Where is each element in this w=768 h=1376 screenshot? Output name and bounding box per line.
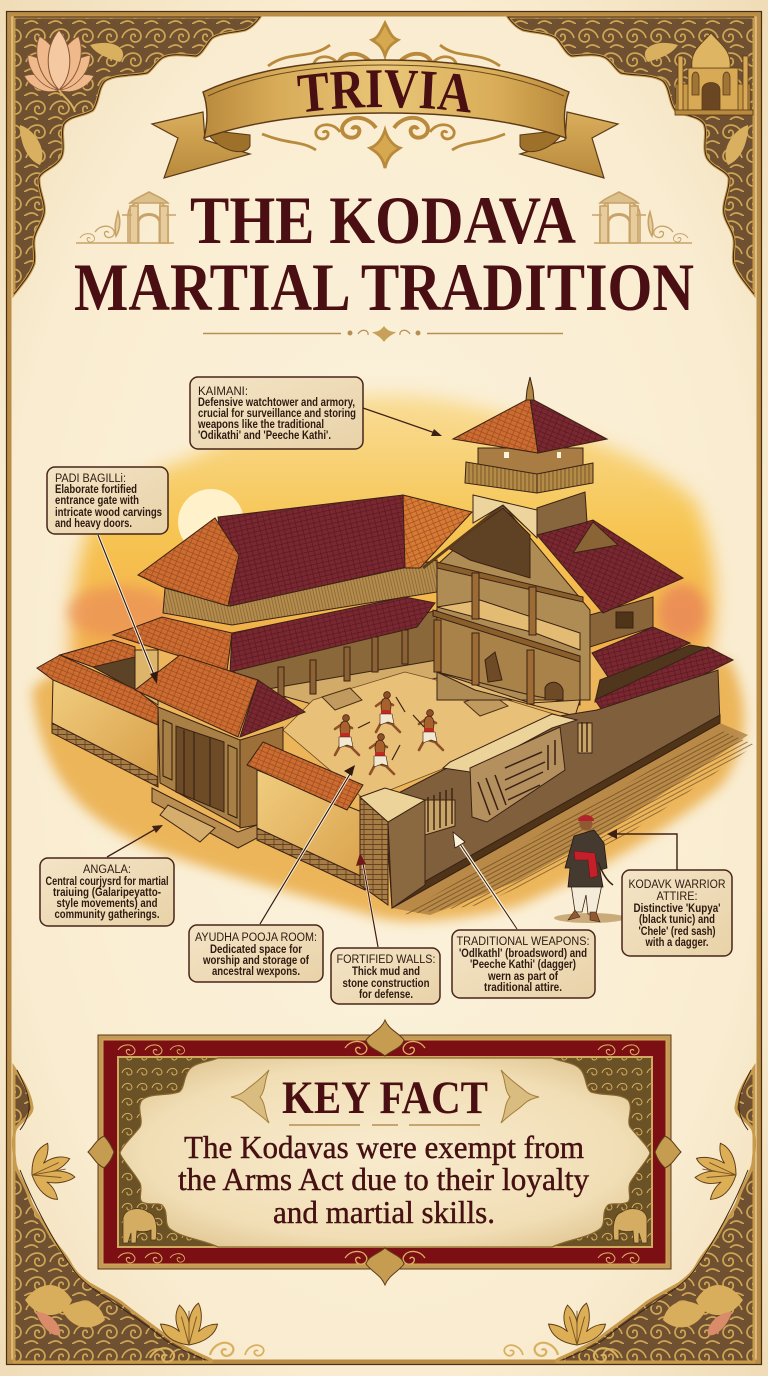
callout: Fortified Walls: FORTIFIED WALLS: <box>336 954 436 966</box>
callout: Traditional Weapons <box>452 930 595 998</box>
veranda back wall <box>232 610 437 697</box>
ornament: ribbon lower scrolls <box>262 118 505 168</box>
callout: Kodava Warrior Attire: with a dagger. <box>645 937 708 949</box>
door panels <box>163 720 237 818</box>
wooden fence front <box>423 723 592 835</box>
lower storey interior <box>437 612 580 705</box>
ornament: heading left <box>231 1070 269 1123</box>
callout: Kodava Warrior Attire: (black tunic) and <box>639 914 715 926</box>
callout: Padi Bagilu: entrance gate with <box>55 495 139 507</box>
gate front face <box>158 707 240 827</box>
red band <box>103 1040 666 1264</box>
warrior trousers <box>571 884 602 914</box>
ornament band <box>118 1057 652 1247</box>
right outer wall <box>385 670 720 908</box>
arrow: Kodava Warrior <box>607 829 677 870</box>
callout: Traditional Weapons: 'Odlkathl' (broadsword) and <box>459 948 587 960</box>
third maroon roof <box>595 647 733 722</box>
crest left <box>88 1136 114 1168</box>
wall coping <box>443 714 577 772</box>
tower shaft left <box>473 495 537 538</box>
tower balcony corner <box>536 474 538 493</box>
back-left roof <box>60 640 135 667</box>
sun <box>178 489 244 555</box>
gate and left wall <box>37 640 425 908</box>
ornament: bottom lotus right <box>548 1303 606 1345</box>
wall base <box>392 715 720 908</box>
tower upper room <box>478 448 583 480</box>
gable timber <box>423 505 537 568</box>
front-left wall base <box>257 828 365 890</box>
tower spire <box>526 377 534 400</box>
tower roof right <box>530 398 607 453</box>
title <box>74 182 694 325</box>
ornament: side lotus left <box>27 1140 78 1203</box>
callout: Ayudha Pooja Room: AYUDHA POOJA ROOM: <box>195 932 317 944</box>
right wing wall <box>590 597 653 647</box>
tower roof left <box>453 398 538 453</box>
body text: the Arms Act due to their loyalty <box>178 1161 589 1197</box>
courtyard fighters <box>335 692 443 774</box>
body text <box>178 1129 589 1230</box>
timber columns <box>434 573 536 704</box>
callout: Fortified Walls: stone construction <box>342 978 430 990</box>
watchtower <box>453 377 607 538</box>
tower windows <box>504 452 509 458</box>
panel frame <box>98 1035 671 1269</box>
callout: Traditional Weapons: wern as part of <box>487 971 558 983</box>
callout: Kaimani: crucial for surveillance and storing <box>198 408 356 420</box>
callout: Kaimani: 'Odikathi' and 'Peeche Kathi'. <box>198 430 331 442</box>
corner block right face <box>388 800 425 908</box>
back-left wall top <box>60 640 135 690</box>
callout: Kodava Warrior Attire: ATTIRE: <box>656 891 698 903</box>
wall face <box>385 670 720 908</box>
tower window right <box>557 452 561 458</box>
corner: top left <box>14 17 260 294</box>
right wing window <box>616 612 633 628</box>
cutaway wing <box>423 505 733 722</box>
left wall roof <box>37 655 158 725</box>
left wall face <box>52 678 158 778</box>
lower orange roof <box>113 617 232 671</box>
front-left wall roof <box>247 742 363 810</box>
front-left wall face <box>257 770 365 888</box>
warrior shadow <box>554 913 626 923</box>
ornament: bottom lotus left <box>160 1303 218 1345</box>
callout: Angala: Central courjysrd for martial <box>46 876 168 888</box>
callout: Kaimani: Defensive watchtower and armory, <box>198 397 355 409</box>
callout: Kodava Warrior Attire: KODAVK WARRIOR <box>628 879 726 891</box>
right wing maroon roof <box>537 520 683 613</box>
callout: Traditional Weapons: 'Peeche Kathi' (dagger) <box>470 959 576 971</box>
ornament: heading right <box>501 1070 539 1123</box>
ribbon main <box>203 60 569 138</box>
sunset sky wash <box>68 395 715 665</box>
corner block top <box>360 788 425 822</box>
callout: Padi Bagilu: and heavy doors. <box>55 518 132 530</box>
warrior head <box>580 818 592 830</box>
warrior dagger <box>598 862 613 885</box>
heading divider <box>289 1124 480 1126</box>
corner: bottom right <box>503 1068 755 1365</box>
arrows <box>98 408 677 947</box>
gate roof <box>135 655 258 737</box>
arrow: Fortified Walls <box>356 853 378 947</box>
arrow: Padi Bagilu <box>98 535 158 684</box>
callout: Traditional Weapons: TRADITIONAL WEAPONS: <box>456 936 590 948</box>
upper storey wall <box>163 560 437 625</box>
warrior turban <box>578 815 594 821</box>
courtyard steps <box>322 688 508 716</box>
callout: Angala: traiuing (Galaripeyatto- <box>53 887 161 899</box>
callout: Ayudha Pooja Room <box>189 925 323 982</box>
warrior feet <box>568 910 600 922</box>
callout: Angala: community gatherings. <box>54 909 160 921</box>
callout: Padi Bagilu: PADI BAGILLi: <box>55 473 126 485</box>
corner: bottom left <box>13 1068 265 1365</box>
arrow: Angala <box>107 825 163 857</box>
lower floor <box>437 672 580 716</box>
veranda floor <box>262 660 437 705</box>
wall niche with weapons <box>470 727 565 822</box>
interior back wall <box>437 505 590 700</box>
callout: Angala: style movements) and <box>56 898 158 910</box>
warrior sash <box>574 851 598 878</box>
main maroon roof <box>218 495 408 606</box>
icon: right gate ornament <box>592 192 692 243</box>
timber beams <box>433 562 583 662</box>
rear orange roof <box>403 495 472 568</box>
arrow: Kaimani <box>363 408 442 436</box>
icon: left gate ornament <box>76 192 176 243</box>
callout: Kaimani: KAIMANI: <box>198 386 248 398</box>
panel: key fact <box>88 1020 681 1285</box>
callout: Fortified Walls: Thick mud and <box>352 966 420 978</box>
fighter 2 <box>376 692 400 732</box>
callout: Angala <box>40 858 174 926</box>
title line 1: THE KODAVA <box>190 182 576 258</box>
warrior tunic <box>565 830 607 887</box>
callout: Ayudha Pooja Room: ancestral wexpons. <box>212 966 300 978</box>
ribbon left tail <box>152 112 250 178</box>
gate side <box>240 727 283 828</box>
rear wall pier <box>135 650 158 705</box>
illustration: fortified ainmane complex <box>32 377 755 921</box>
band scrolls <box>118 1041 639 1264</box>
courtyard floor <box>283 672 560 800</box>
ground hatching <box>400 730 755 915</box>
callout: Kaimani <box>190 377 363 449</box>
hip orange roof <box>138 518 239 606</box>
callout: Angala: ANGALA: <box>83 864 131 876</box>
callout: Padi Bagilu: Elaborate fortified <box>55 484 137 496</box>
ornament: side lotus right <box>690 1140 741 1203</box>
crest bottom <box>366 1248 404 1285</box>
interior rafters <box>448 508 530 578</box>
fighter 4 <box>370 734 394 774</box>
callout: Ayudha Pooja Room: Dedicated space for <box>210 944 302 956</box>
callout: Padi Bagilu: intricate wood carvings <box>55 507 162 519</box>
callout: Fortified Walls <box>331 948 440 1004</box>
divider ornament <box>203 326 563 342</box>
text: TRIVIA <box>275 107 495 114</box>
arrow: Ayudha Pooja <box>260 765 355 924</box>
corner block left face <box>360 797 388 905</box>
gate door <box>176 726 224 812</box>
fence slats <box>428 722 587 832</box>
callout: Padi Bagilu <box>47 467 168 534</box>
tower balcony <box>465 462 593 493</box>
gate gable roof <box>240 680 305 737</box>
fighter 3 <box>419 710 443 750</box>
callout: Kodava Warrior Attire: 'Chele' (red sash) <box>638 926 716 938</box>
callout: Ayudha Pooja Room: worship and storage of <box>202 955 309 967</box>
icon: elephant right <box>613 1209 647 1243</box>
callout: Kodava Warrior Attire: Distinctive 'Kupya' <box>634 903 721 915</box>
ornament: top crest <box>268 23 500 74</box>
icon: domed palace <box>675 33 753 115</box>
crest right <box>655 1136 681 1168</box>
gate plinth <box>152 788 257 848</box>
scalloped parchment <box>120 1058 650 1247</box>
ribbon right tail <box>520 112 618 178</box>
corner: top right <box>508 17 754 294</box>
warrior figure <box>554 815 626 923</box>
ground wash <box>32 650 744 921</box>
crest top <box>366 1020 404 1056</box>
ribbon inner rule <box>208 65 564 96</box>
left wall base <box>52 723 158 787</box>
body text: The Kodavas were exempt from <box>184 1129 584 1165</box>
banner: Trivia ribbon: TRIVIA <box>297 70 470 113</box>
icon: elephant left <box>123 1209 157 1243</box>
icon: peach lotus <box>21 30 97 112</box>
callout: Traditional Weapons: traditional attire. <box>484 982 562 994</box>
ribbon fold left <box>206 130 250 152</box>
banner: Trivia ribbon <box>150 20 620 179</box>
veranda posts <box>278 630 408 699</box>
callout: Kodava Warrior Attire <box>622 870 732 956</box>
fighter 1 <box>335 715 359 755</box>
wing small gable <box>573 522 618 553</box>
gate steps <box>160 805 215 842</box>
wing lower wall <box>595 645 708 702</box>
lower maroon roof <box>230 597 435 672</box>
arrow: Traditional Weapons <box>453 832 517 929</box>
fighter swords <box>358 697 424 760</box>
heading: KEY FACT <box>282 1072 488 1124</box>
stored jars and weapons <box>485 652 563 700</box>
main hall <box>113 495 472 705</box>
callout: Fortified Walls: for defense. <box>359 989 413 1001</box>
callout: Kaimani: weapons like the traditional <box>197 419 324 431</box>
ribbon fold right <box>520 130 564 152</box>
second maroon roof <box>592 627 690 680</box>
ground shadow below wall <box>392 723 748 915</box>
tower shaft right <box>537 492 587 535</box>
body text: and martial skills. <box>273 1194 495 1230</box>
upper floor planks <box>437 600 580 650</box>
